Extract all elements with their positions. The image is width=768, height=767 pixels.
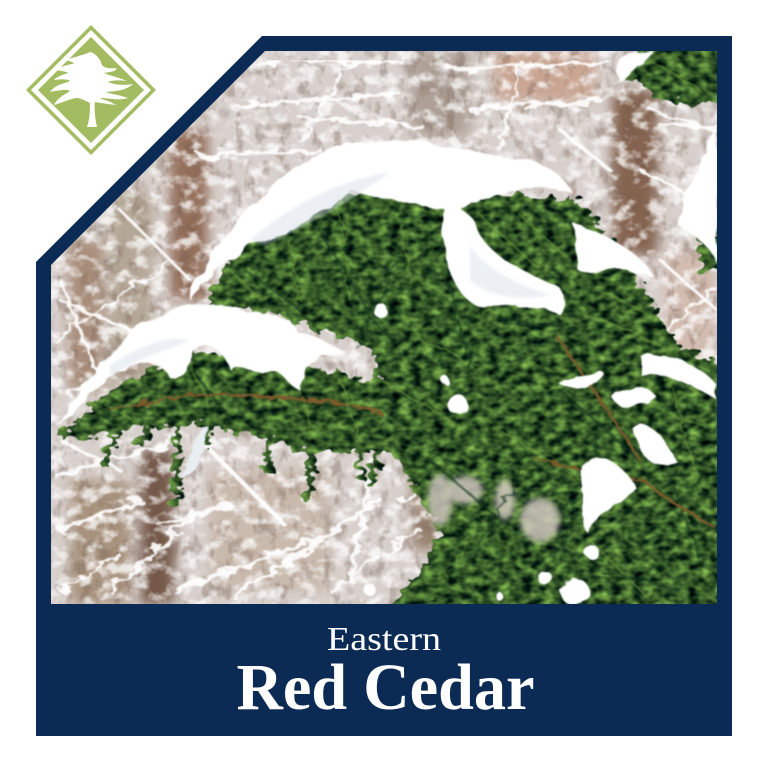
cedar foliage: main crown	[56, 51, 717, 604]
snow clumps	[55, 51, 717, 605]
gaps in foliage showing the pale background	[428, 474, 560, 542]
logo: tree in diamond	[26, 25, 156, 155]
needle highlights	[80, 60, 717, 600]
caption: Red Cedar: Red Cedar	[236, 651, 534, 724]
white snowy branches	[55, 60, 717, 600]
forest background	[68, 51, 717, 604]
photo: snowy cedar	[51, 51, 717, 604]
icon: white tree	[50, 52, 133, 127]
caption: Eastern: Eastern	[327, 621, 441, 658]
caption band	[36, 604, 732, 736]
